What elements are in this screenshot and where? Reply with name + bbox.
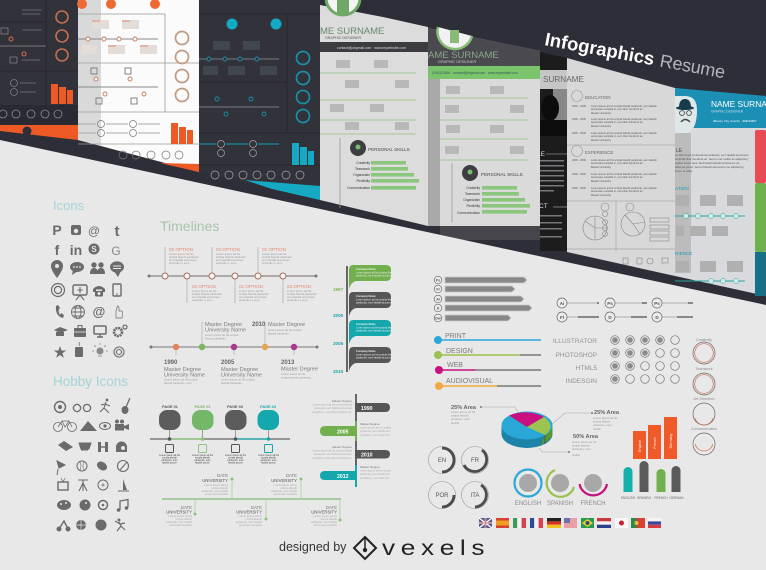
chart: option timeline: 03 OPTION <box>192 284 216 289</box>
chart: page timeline: Lorem ipsum ad his <box>258 454 280 457</box>
panel: light green resume <box>320 0 428 226</box>
attribution: designed by vexels: vexels <box>382 536 490 560</box>
chart: master degree timeline: Lorem ipsum ad his scripta <box>164 378 198 382</box>
chart: year tabs timeline: Lorem ipsum ad his scripta <box>360 426 392 430</box>
chart: page timeline: Lorem ipsum ad his <box>225 454 247 457</box>
chart: option timeline: 02 OPTION <box>262 247 286 252</box>
panel: dark header green resume: (000)123456 · contact@jobgmail.com · www.mywebsite.com <box>432 71 518 75</box>
chart: software skill sliders: Ai <box>560 301 564 306</box>
chart: university timeline: scripta blandit <box>245 517 262 521</box>
chart: master degree timeline: 2013 <box>281 360 295 366</box>
chart: page timeline: Lorem ipsum ad his <box>159 454 181 457</box>
icon grid: @ <box>93 304 105 319</box>
chart: page timeline: fastidii accum <box>228 462 243 464</box>
chart: 3D pie: fastidii <box>451 421 459 425</box>
chart: rounded language bars: SPANISH <box>637 496 652 500</box>
heading: Icons: Icons <box>53 198 85 213</box>
chart: master degree timeline: Master Degree <box>281 366 318 372</box>
chart: software arrow bars: Ai <box>436 298 440 302</box>
chart: option timeline <box>148 247 318 303</box>
chart: 3D pie: 25% Area <box>451 405 477 411</box>
chart: master degree timeline: University Name <box>221 372 262 378</box>
chart: university timeline: UNIVERSITY <box>202 478 228 483</box>
panel: education resume: 2000 - 2000 <box>572 104 586 108</box>
chart: 3D pie: partiendo, eum <box>451 417 470 421</box>
chart: print design web audiovisual bars: PRINT <box>445 333 467 340</box>
chart: year tabs timeline: euripidis in, eum liber hendrerit an. <box>312 456 352 460</box>
panel: light green resume: Communication <box>347 186 370 190</box>
panel: dark header green resume: AME SURNAME <box>428 50 499 61</box>
chart: university timeline: scripta blandit <box>320 517 337 521</box>
panel: light green resume: Flexibility <box>356 179 370 183</box>
chart: year tabs timeline: 2012 <box>337 474 349 480</box>
chart: page timeline: scripta blandit <box>261 456 276 460</box>
chart: company name bubbles timeline: Company Name <box>356 349 376 353</box>
chart: master degree timeline: University Name <box>205 328 246 334</box>
chart: rounded language bars: ENGLISH <box>621 496 636 500</box>
chart: university timeline: DATE <box>181 505 192 510</box>
chart: page timeline: fastidii accum <box>162 462 177 464</box>
chart: ability rings: Communication <box>691 427 717 431</box>
chart: university timeline: DATE <box>251 505 262 510</box>
panel: dark header green resume: Organizatin <box>463 198 480 202</box>
chart: company name bubbles timeline: Company Name <box>356 322 376 326</box>
icon grid: @ <box>88 224 100 238</box>
panel: education resume: Master University <box>591 193 612 197</box>
chart: software arrow bars: Ps <box>436 278 440 282</box>
panel: teal header resume: euripidis liber hendrerit an. Sed ut met molllis ac adipiscing <box>675 157 748 161</box>
panel: education resume: Master University <box>591 111 612 115</box>
panel: teal header resume: tellus ac purus. Sed et blandit elementum eu adipiscing <box>675 165 744 169</box>
chart: language donuts: EN <box>438 458 446 464</box>
chart: university timeline: DATE <box>326 505 337 510</box>
chart: 3D pie: partiendo, eum <box>593 423 612 427</box>
panel: dark header green resume: Creativity <box>466 186 480 190</box>
icon grid: ★ <box>54 344 67 360</box>
panel: dark header green resume: Communication <box>457 211 480 215</box>
chart: dot rating <box>553 336 679 385</box>
chart: master degree timeline: 2010 <box>252 322 266 328</box>
panel: teal header resume <box>675 88 766 296</box>
chart: year tabs timeline: euripidis in, eum liber hendrerit an. <box>312 410 352 414</box>
chart: orange language bars <box>633 417 677 459</box>
panel: dark header green resume: PERSONAL SKILLS <box>481 172 523 177</box>
chart: option timeline: 02 OPTION <box>169 247 193 252</box>
chart: print design web audiovisual bars: AUDIOVISUAL <box>446 378 493 385</box>
heading: Timelines: Timelines <box>160 218 219 234</box>
chart: orange language bars: English <box>638 440 642 452</box>
chart: company name bubbles timeline: Company Name <box>356 267 376 271</box>
panel: education resume: EXPERIENCE <box>585 150 613 155</box>
chart: 3D pie: scripta blandit <box>572 444 589 448</box>
panel: teal header resume: sapien lectus quis. Sed fastidii blandit scriptorem ea <box>675 161 740 165</box>
chart: master degree timeline: blandit partiendo, <box>268 332 290 336</box>
icon grid: f <box>55 242 60 258</box>
chart: 3D pie: Lorem ipsum ad his <box>572 440 597 444</box>
panel: education resume: Master University <box>591 179 612 183</box>
panel: white orange resume <box>77 0 199 172</box>
chart: software skill sliders: D <box>608 315 612 320</box>
chart: option timeline: eum fastidii accumsan <box>169 258 197 262</box>
chart: language donuts: FR <box>471 458 480 464</box>
chart: page timeline: partiendo, eum <box>195 459 210 462</box>
chart: university timeline: partiendo, eum fastidii <box>271 489 297 493</box>
chart: option timeline: eum fastidii accumsan <box>192 295 220 299</box>
chart: master degree timeline: blandit partiendo, eum <box>164 381 192 385</box>
chart: option timeline: eum fastidii accumsan <box>216 258 244 262</box>
chart: option timeline: euripidis in, eum <box>169 261 190 265</box>
chart: university timeline: partiendo, eum fastidii <box>236 520 262 524</box>
chart: university timeline: DATE <box>217 473 228 478</box>
chart: dot rating: HTML5 <box>576 365 597 372</box>
chart: page timeline <box>150 405 290 464</box>
chart: 3D pie: Lorem ipsum ad his <box>593 416 618 420</box>
chart: company name bubbles timeline: Lorem ipsum ad his scripta blandit <box>356 326 396 330</box>
chart: master degree timeline: 2005 <box>221 360 235 366</box>
panel: education resume: accumsan euripidis in, eum liber hendrerit an. <box>591 134 644 138</box>
chart: company name bubbles timeline: partiendo, eum fastidii accumsan <box>356 356 394 360</box>
chart: year tabs timeline: partiendo, eum fastidii accumsan <box>314 406 353 410</box>
chart: university timeline: Lorem ipsum ad his <box>314 514 338 518</box>
chart: orange language bars: Germany <box>669 433 673 448</box>
chart: software skill sliders: Ps <box>607 301 613 306</box>
flags row <box>479 518 661 528</box>
chart: university timeline: accumsan euripidis <box>169 523 193 527</box>
chart: page timeline: scripta blandit <box>228 456 243 460</box>
panel: education resume: Master University <box>591 165 612 169</box>
icon grid: P <box>52 222 62 238</box>
panel: education resume <box>543 58 675 276</box>
chart: 3D pie: scripta blandit <box>451 414 468 418</box>
panel: education resume: Lorem ipsum ad his scripta blandit partiendo, eum fastidii <box>591 186 657 190</box>
panel: light green resume: GRAPHIC DESIGNER <box>325 36 362 40</box>
chart: year tabs timeline: partiendo, eum fastidii acc <box>360 472 391 476</box>
chart: page timeline: PAGE 04 <box>260 405 277 409</box>
chart: orange language bars: French <box>653 437 657 449</box>
chart: rounded language bars: FRENCH <box>654 496 668 500</box>
chart: master degree timeline: Lorem ipsum ad his scripta <box>268 328 302 332</box>
chart: page timeline: PAGE 03 <box>227 405 243 409</box>
chart: university timeline <box>162 473 342 527</box>
chart: language progress rings <box>514 470 607 507</box>
chart: option timeline: Lorem ipsum ad his <box>192 289 217 293</box>
chart: master degree timeline: Lorem ipsum ad his <box>281 372 306 376</box>
chart: 3D pie <box>451 405 620 457</box>
light lower background with diagonal edge <box>0 140 766 570</box>
panel: education resume: 2000 - 2000 <box>572 117 586 121</box>
chart: language progress rings: ENGLISH <box>515 501 541 507</box>
chart: university timeline: Lorem ipsum ad his <box>169 514 193 518</box>
chart: company name bubbles timeline: 2010 <box>333 369 344 374</box>
chart: master degree timeline: Lorem ipsum ad his scripta <box>221 378 255 382</box>
chart: university timeline: Lorem ipsum ad his <box>274 483 298 487</box>
chart: year tabs timeline: euripidis in, eum liber hen <box>360 476 390 480</box>
chart: language donuts: ITA <box>471 493 479 499</box>
chart: rounded language bars: GERMAN <box>670 496 684 500</box>
chart: page timeline: PAGE 02 <box>195 405 210 409</box>
chart: option timeline: Lorem ipsum ad his <box>262 252 287 256</box>
panel: dark teal resume <box>199 0 320 200</box>
chart: year tabs timeline: Master Degree <box>332 445 352 449</box>
chart: page timeline: scripta blandit <box>195 456 210 460</box>
chart: university timeline: UNIVERSITY <box>166 510 192 514</box>
chart: page timeline: Lorem ipsum ad his <box>192 454 214 457</box>
chart: option timeline: scripta blandit partiendo <box>216 255 246 259</box>
chart: master degree timeline: University Name <box>164 372 205 378</box>
chart: page timeline: PAGE 01 <box>162 405 178 409</box>
panel: education resume: Lorem ipsum ad his scripta blandit partiendo, eum fastidii <box>591 131 657 135</box>
chart: 3D pie: 50% Area <box>573 434 599 440</box>
chart: master degree timeline: Master Degree <box>221 367 258 373</box>
chart: university timeline: Lorem ipsum ad his <box>205 483 229 487</box>
panel: education resume: accumsan euripidis in, eum liber hendrerit an. <box>591 120 644 124</box>
chart: language progress rings: SPANISH <box>547 501 573 507</box>
chart: company name bubbles timeline: 1997 <box>333 287 344 292</box>
chart: option timeline: scripta blandit partiendo <box>287 292 317 296</box>
panel: education resume: accumsan euripidis in, eum liber hendrerit an. <box>591 189 644 193</box>
panel: education resume: Lorem ipsum ad his scripta blandit partiendo, eum fastidii <box>591 158 657 162</box>
chart: master degree timeline: 1990 <box>164 360 178 366</box>
chart: language donuts <box>428 446 488 508</box>
panel: black sidebar resume <box>537 52 567 251</box>
hobby icon grid <box>54 398 130 532</box>
panel: light green resume: Organizatin <box>353 173 370 177</box>
chart: option timeline: eum fastidii accumsan <box>262 258 290 262</box>
chart: software skill sliders: D <box>655 315 659 320</box>
chart: option timeline: euripidis in, eum <box>239 298 260 302</box>
panel: light green resume: Teamwork <box>355 167 370 171</box>
chart: year tabs timeline: partiendo, eum fastidii acc <box>360 429 391 433</box>
panel: dark header green resume: Flexibility <box>466 204 480 208</box>
panel: teal header resume: lorem et tellus. <box>675 169 693 173</box>
title: Infographics Resume <box>543 28 727 82</box>
panel: dark header green resume: Teamwork <box>465 192 480 196</box>
panel: education resume: 2000 - 2000 <box>572 172 586 176</box>
chart: university timeline: partiendo, eum fastidii <box>166 520 192 524</box>
chart: university timeline: accumsan euripidis <box>314 523 338 527</box>
panel: black sidebar resume: CT <box>539 203 548 210</box>
chart: year tabs timeline: 2010 <box>361 452 373 458</box>
chart: option timeline: euripidis in, eum <box>192 298 213 302</box>
chart: ability rings: Teamwork <box>695 367 713 371</box>
attribution: designed by vexels <box>279 536 490 560</box>
icon grid: in <box>70 242 82 258</box>
panel: teal header resume: Wkman, City, Country · 998234567 <box>713 119 757 123</box>
chart: option timeline: euripidis in, eum <box>287 298 308 302</box>
chart: year tabs timeline: Lorem ipsum ad his scripta blandit <box>313 448 352 452</box>
chart: rounded language bars <box>621 461 684 500</box>
chart: company name bubbles timeline: Lorem ipsum ad his scripta blandit <box>356 270 396 274</box>
chart: software arrow bars: Dw <box>435 316 441 320</box>
panel: education resume: SURNAME <box>543 75 584 84</box>
chart: year tabs timeline: partiendo, eum fastidii accumsan <box>314 452 353 456</box>
chart: company name bubbles timeline: partiendo, eum fastidii accumsan <box>356 274 394 278</box>
chart: 3D pie: scripta blandit <box>593 420 610 424</box>
chart: language progress rings: FRENCH <box>580 501 606 507</box>
panel: education resume: 2000 - 2000 <box>572 186 586 190</box>
panel: teal header resume: on adi ut sed professional partiendo, eum fastidii accumsan <box>675 153 749 157</box>
chart: software skill sliders: Ps <box>654 301 660 306</box>
panel: dark header green resume: GRAPHIC DESIGNER <box>438 60 476 64</box>
chart: university timeline: accumsan euripidis <box>239 523 263 527</box>
chart: option timeline: 01 OPTION <box>239 284 263 289</box>
icon grid: t <box>114 223 120 240</box>
chart: company name bubbles timeline: 2005 <box>333 341 344 346</box>
chart: company name bubbles timeline: 2000 <box>333 313 344 318</box>
chart: software arrow bars <box>434 276 532 322</box>
panel: education resume: accumsan euripidis in, eum liber hendrerit an. <box>591 107 644 111</box>
chart: dot rating: ILLUSTRATOR <box>553 338 597 345</box>
top banner with resume previews <box>0 0 766 320</box>
chart: page timeline: partiendo, eum <box>162 459 177 462</box>
chart: software arrow bars: Fl <box>436 288 440 292</box>
chart: print design web audiovisual bars: DESIGN <box>446 348 473 355</box>
panel: education resume: EDUCATION <box>585 95 611 100</box>
chart: university timeline: accumsan euripidis <box>205 492 229 496</box>
panel: education resume: Master University <box>591 124 612 128</box>
chart: master degree timeline: Master Degree <box>268 322 305 328</box>
chart: ability rings: Art Direction <box>694 397 714 401</box>
chart: master degree timeline: blandit partiendo, <box>205 336 227 340</box>
chart: 3D pie: fastidii <box>572 453 580 457</box>
panel: education resume: accumsan euripidis in, eum liber hendrerit an. <box>591 175 644 179</box>
heading: Hobby Icons: Hobby Icons <box>53 374 128 389</box>
chart: option timeline: eum fastidii accumsan <box>239 295 267 299</box>
panel: light green resume: contact@jobgmail.com · www.mywebsite.com <box>337 46 406 50</box>
chart: university timeline: partiendo, eum fastidii <box>202 489 228 493</box>
chart: year tabs timeline: Master Degree <box>360 465 380 469</box>
chart: print design web audiovisual bars: WEB <box>447 362 463 369</box>
chart: option timeline: Lorem ipsum ad his <box>216 252 241 256</box>
chart: university timeline: scripta blandit <box>175 517 192 521</box>
chart: option timeline: 04 OPTION <box>216 247 240 252</box>
chart: year tabs timeline <box>312 394 392 487</box>
panel: teal header resume: GRAPHIC DESIGNER <box>711 110 744 114</box>
chart: company name bubbles timeline: partiendo, eum fastidii accumsan <box>356 328 394 332</box>
chart: option timeline: Lorem ipsum ad his <box>169 252 194 256</box>
panel: education resume: Lorem ipsum ad his scripta blandit partiendo, eum fastidii <box>591 117 657 121</box>
chart: university timeline: UNIVERSITY <box>236 510 262 514</box>
chart: university timeline: UNIVERSITY <box>311 510 337 514</box>
panel: light green resume: Creativity <box>356 161 370 165</box>
chart: master degree timeline: Lorem ipsum ad his scripta <box>205 333 239 337</box>
chart: option timeline: scripta blandit partiendo <box>239 292 269 296</box>
chart: dot rating: INDESGIN <box>566 378 597 385</box>
chart: ability rings <box>691 338 717 455</box>
chart: university timeline: scripta blandit <box>280 486 297 490</box>
panel: education resume: Lorem ipsum ad his scripta blandit partiendo, eum fastidii <box>591 172 657 176</box>
chart: page timeline: scripta blandit <box>162 456 177 460</box>
chart: company name bubbles timeline <box>333 265 396 374</box>
panel: teal header resume: ATION <box>675 186 689 191</box>
chart: year tabs timeline: euripidis in, eum liber hen <box>360 433 390 437</box>
attribution: designed by vexels: designed by <box>279 540 347 554</box>
chart: page timeline: partiendo, eum <box>228 459 243 462</box>
chart: year tabs timeline: Lorem ipsum ad his scripta <box>360 468 392 472</box>
chart: ability rings: Creativity <box>696 338 712 342</box>
chart: university timeline: UNIVERSITY <box>271 478 297 483</box>
title: Infographics Resume: Infographics <box>543 28 656 69</box>
chart: university timeline: accumsan euripidis <box>274 492 298 496</box>
chart: option timeline: euripidis in, eum <box>262 261 283 265</box>
panel: education resume: 2000 - 2000 <box>572 131 586 135</box>
panel: teal header resume: LE <box>676 148 683 154</box>
chart: university timeline: scripta blandit <box>211 486 228 490</box>
chart: year tabs timeline: 1990 <box>361 406 373 412</box>
chart: option timeline: euripidis in, eum <box>216 261 237 265</box>
chart: software arrow bars: D <box>437 306 440 310</box>
chart: 3D pie: 25% Area <box>594 410 620 416</box>
panel: dark header green resume <box>428 27 540 240</box>
panel: light green resume: ME SURNAME <box>320 26 384 37</box>
panel: black sidebar resume: LE <box>537 151 546 158</box>
chart: master degree timeline <box>150 322 318 385</box>
chart: master degree timeline: Master Degree <box>205 322 242 328</box>
chart: year tabs timeline: Lorem ipsum ad his scripta blandit <box>313 402 352 406</box>
chart: master degree timeline: scripta blandit partiendo, <box>281 376 312 380</box>
chart: page timeline: partiendo, eum <box>261 459 276 462</box>
panel: education resume: Master University <box>591 138 612 142</box>
chart: software skill sliders <box>557 298 693 322</box>
chart: option timeline: 03 OPTION <box>287 284 311 289</box>
chart: option timeline: scripta blandit partiendo <box>169 255 199 259</box>
chart: master degree timeline: blandit partiendo, <box>221 381 243 385</box>
chart: 3D pie: fastidii <box>593 427 601 431</box>
chart: language donuts: POR <box>435 493 449 499</box>
title: Infographics Resume: Resume <box>658 51 727 82</box>
chart: university timeline: DATE <box>286 473 297 478</box>
panel: teal header resume: RIENCE <box>675 251 692 256</box>
chart: 3D pie: partiendo, eum <box>572 447 591 451</box>
chart: option timeline: eum fastidii accumsan <box>287 295 315 299</box>
chart: university timeline: partiendo, eum fastidii <box>311 520 337 524</box>
panel: education resume: accumsan euripidis in, eum liber hendrerit an. <box>591 161 644 165</box>
chart: print design web audiovisual bars <box>434 333 541 390</box>
chart: page timeline: fastidii accum <box>261 462 276 464</box>
chart: company name bubbles timeline: Lorem ipsum ad his scripta blandit <box>356 352 396 356</box>
chart: university timeline: Lorem ipsum ad his <box>239 514 263 518</box>
panel: education resume: 2000 - 2000 <box>572 158 586 162</box>
chart: option timeline: Lorem ipsum ad his <box>239 289 264 293</box>
chart: option timeline: Lorem ipsum ad his <box>287 289 312 293</box>
icon grid <box>51 222 127 360</box>
chart: option timeline: scripta blandit partiendo <box>192 292 222 296</box>
panel: education resume: Lorem ipsum ad his scripta blandit partiendo, eum fastidii <box>591 104 657 108</box>
chart: option timeline: scripta blandit partiendo <box>262 255 292 259</box>
chart: company name bubbles timeline: partiendo, eum fastidii accumsan <box>356 300 394 304</box>
chart: 3D pie: Lorem ipsum ad his <box>451 410 476 414</box>
chart: dot rating: PHOTOSHOP <box>556 352 597 359</box>
chart: year tabs timeline: 2005 <box>337 430 349 436</box>
chart: year tabs timeline: Master Degree <box>360 422 380 426</box>
icon grid: S <box>91 245 97 254</box>
icon grid: G <box>111 244 121 258</box>
chart: master degree timeline: Master Degree <box>164 367 201 373</box>
chart: company name bubbles timeline: Lorem ipsum ad his scripta blandit <box>356 298 396 302</box>
chart: page timeline: fastidii accum <box>195 462 210 464</box>
chart: software skill sliders: Fl <box>560 315 564 320</box>
chart: year tabs timeline: Master Degree <box>332 399 352 403</box>
panel: dark orange resume <box>0 0 78 140</box>
panel: light green resume: PERSONAL SKILLS <box>368 147 410 152</box>
chart: company name bubbles timeline: Company Name <box>356 294 376 298</box>
